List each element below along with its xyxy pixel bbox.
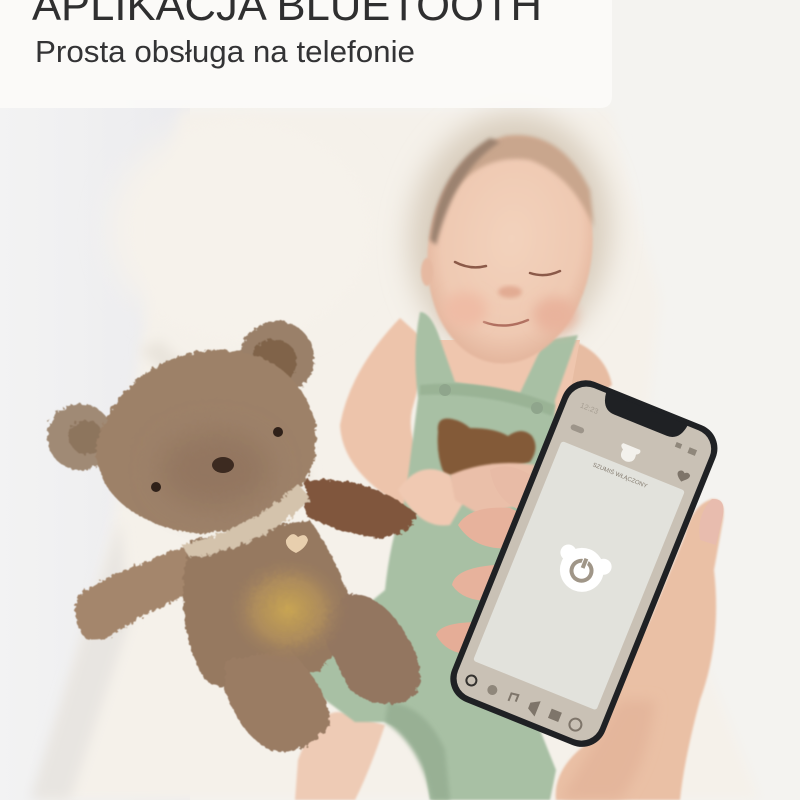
phone body xyxy=(443,373,725,754)
teddy patch xyxy=(438,419,536,480)
bear body xyxy=(183,520,362,688)
status label: SZUMIŚ WŁĄCZONY xyxy=(592,461,649,490)
bear head xyxy=(96,350,316,533)
overalls xyxy=(303,312,578,800)
phone xyxy=(443,373,725,754)
status bar: 12:23 xyxy=(579,401,600,416)
hand xyxy=(436,466,724,800)
fingers xyxy=(436,466,545,654)
phone screen xyxy=(451,381,717,747)
status bar xyxy=(570,400,698,476)
overall buttons xyxy=(439,384,543,414)
header panel xyxy=(0,0,612,108)
content panel xyxy=(473,441,685,710)
bear scarf xyxy=(182,484,310,558)
small bear logo xyxy=(616,443,641,465)
thumb nail xyxy=(699,499,724,545)
baby lower leg xyxy=(295,712,385,800)
bear legs xyxy=(225,594,420,752)
bear ears xyxy=(47,321,314,470)
bottom toolbar icons xyxy=(464,674,584,732)
teddy bear xyxy=(47,321,420,752)
power bear button xyxy=(549,539,615,600)
bear face xyxy=(151,427,283,492)
bear belly glow xyxy=(226,555,350,665)
subtitle: Prosta obsługa na telefonie xyxy=(35,34,415,69)
baby xyxy=(295,126,612,800)
baby hands xyxy=(398,463,535,526)
palm shadow xyxy=(560,700,655,800)
notch xyxy=(600,392,688,442)
baby arms xyxy=(340,318,612,525)
baby head xyxy=(413,126,607,374)
bear arms xyxy=(75,479,418,640)
bear heart xyxy=(286,534,308,553)
heart sound icon xyxy=(675,469,691,484)
palm and thumb xyxy=(556,499,724,800)
baby face xyxy=(443,262,577,333)
baby chest xyxy=(420,340,580,420)
